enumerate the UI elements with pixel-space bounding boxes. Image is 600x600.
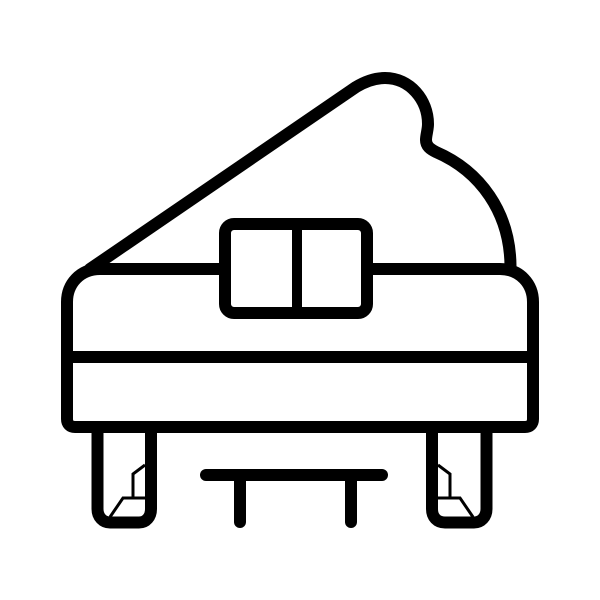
piano lid [90,78,510,269]
piano body [67,269,533,427]
right piano leg [432,427,486,522]
body divider [67,351,533,363]
piano bench [206,475,382,522]
music stand [225,224,367,313]
left piano leg [98,427,151,522]
